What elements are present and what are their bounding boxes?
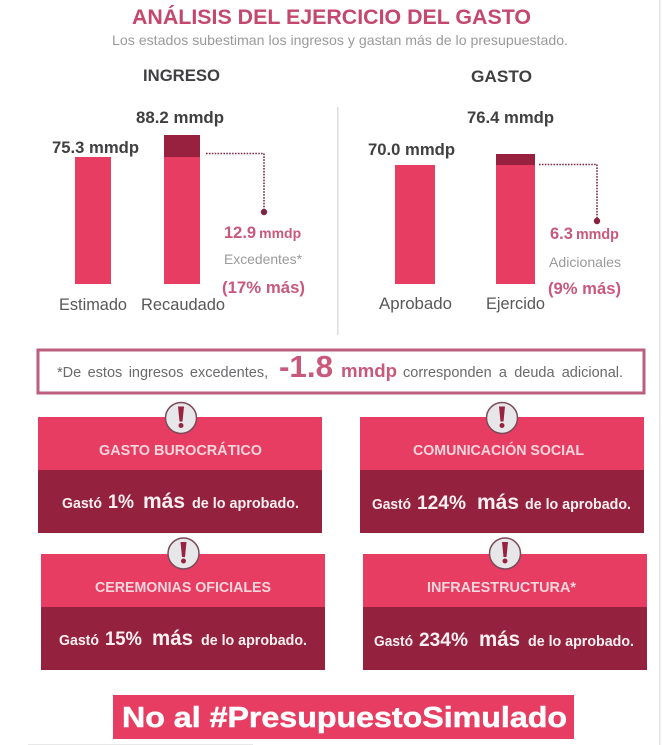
card text: 1% <box>108 491 134 513</box>
callout: adicionales: 6.3mmdp <box>550 225 619 243</box>
card text <box>59 627 307 650</box>
card text: 15% <box>105 628 142 650</box>
bar: aprobado <box>395 165 435 284</box>
callout: excedentes <box>222 224 305 297</box>
heading: ingreso: INGRESO <box>143 66 220 85</box>
card text <box>62 490 299 513</box>
card text: Gastó <box>59 633 99 649</box>
bar: ejercido <box>496 154 535 284</box>
panel: ingreso <box>52 66 305 314</box>
card text: de lo aprobado. <box>525 497 631 513</box>
panel: gasto <box>368 67 621 313</box>
callout: deuda adicional: -1.8 <box>279 349 333 384</box>
callout: excedentes: 12.9mmdp <box>224 224 301 242</box>
card text: 124% <box>417 492 466 514</box>
callout: deuda adicional: mmdp <box>341 360 397 381</box>
card text: de lo aprobado. <box>201 633 307 649</box>
label: recaudado: Recaudado <box>141 296 225 314</box>
banner: hashtag: No al #PresupuestoSimulado <box>122 702 567 734</box>
card text: 234% <box>419 629 468 651</box>
card text: más <box>477 491 519 514</box>
card text: más <box>152 627 193 650</box>
card: gasto burocrático <box>38 402 322 533</box>
card text: más <box>143 490 185 513</box>
label: ejercido: Ejercido <box>486 295 545 313</box>
callout: deuda adicional <box>38 349 644 393</box>
card heading: INFRAESTRUCTURA* <box>427 580 576 596</box>
title: ANÁLISIS DEL EJERCICIO DEL GASTO <box>132 4 531 29</box>
connector: adicionales <box>539 164 600 224</box>
icon: alert <box>168 538 199 569</box>
banner: hashtag <box>113 695 574 739</box>
bar: estimado <box>75 157 111 284</box>
connector: excedentes <box>206 154 267 215</box>
bar: recaudado <box>164 135 200 284</box>
value: aprobado: 70.0 mmdp <box>368 140 455 159</box>
card heading: COMUNICACIÓN SOCIAL <box>413 441 584 459</box>
value: estimado: 75.3 mmdp <box>52 138 139 157</box>
icon: alert <box>490 538 520 569</box>
card text: más <box>479 628 520 651</box>
icon: alert <box>166 402 196 434</box>
card text: de lo aprobado. <box>192 496 299 512</box>
callout: adicionales: Adicionales <box>549 254 621 270</box>
card text: Gastó <box>372 497 411 513</box>
heading: gasto: GASTO <box>471 67 532 86</box>
callout: deuda adicional: corresponden a deuda adicional. <box>403 365 623 381</box>
card: comunicación social <box>360 402 644 533</box>
card heading: GASTO BUROCRÁTICO <box>99 442 262 459</box>
label: estimado: Estimado <box>59 296 127 314</box>
value: ejercido: 76.4 mmdp <box>467 108 554 127</box>
label: aprobado: Aprobado <box>379 295 452 313</box>
card text: Gastó <box>62 496 102 512</box>
card text <box>374 628 634 651</box>
callout: adicionales: (9% más) <box>548 279 621 298</box>
callout: excedentes: (17% más) <box>222 278 305 297</box>
callout: excedentes: Excedentes* <box>224 251 303 267</box>
card heading: CEREMONIAS OFICIALES <box>95 580 271 596</box>
callout: deuda adicional: *De estos ingresos excedentes, <box>57 365 268 381</box>
card text: de lo aprobado. <box>528 634 634 650</box>
card text <box>372 491 631 514</box>
callout: adicionales <box>548 225 621 298</box>
value: recaudado: 88.2 mmdp <box>136 108 224 127</box>
card: ceremonias oficiales <box>41 538 325 670</box>
card: infraestructura <box>363 538 647 670</box>
card text: Gastó <box>374 634 413 650</box>
subtitle: Los estados subestiman los ingresos y gastan más de lo presupuestado. <box>112 32 568 48</box>
icon: alert <box>486 402 518 434</box>
